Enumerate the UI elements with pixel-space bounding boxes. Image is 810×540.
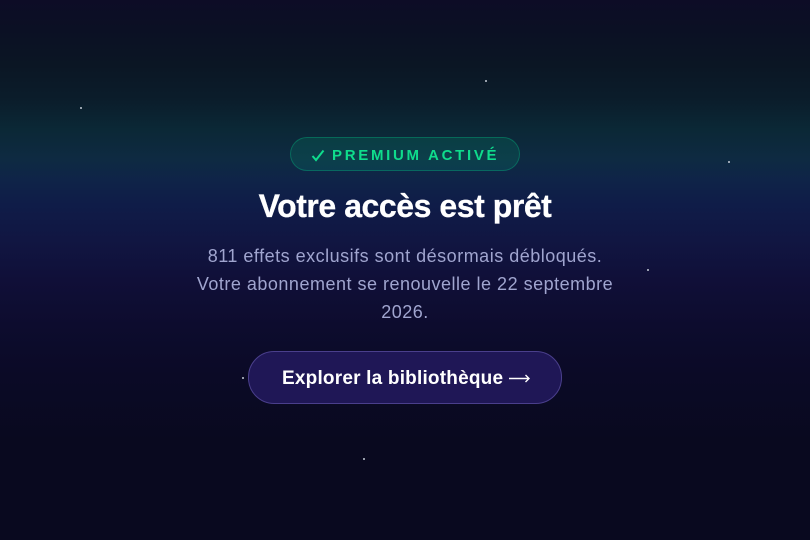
description text: 2026. xyxy=(381,302,429,322)
star 6 xyxy=(363,458,365,460)
badge: premium active: PREMIUM ACTIVÉ xyxy=(332,147,499,164)
call-to-action button: Explorer la bibliothèque xyxy=(282,368,503,389)
call-to-action button xyxy=(248,351,562,404)
heading: Votre accès est prêt xyxy=(259,188,551,224)
star 4 xyxy=(647,269,649,271)
star 2 xyxy=(485,80,487,82)
description text: Votre abonnement se renouvelle le 22 septembre xyxy=(197,274,613,294)
description text xyxy=(197,246,613,322)
description text: 811 effets exclusifs sont désormais débloqués. xyxy=(208,246,602,266)
star 5 xyxy=(242,377,244,379)
star 3 xyxy=(728,161,730,163)
star 1 xyxy=(80,107,82,109)
badge: premium active xyxy=(290,137,520,171)
